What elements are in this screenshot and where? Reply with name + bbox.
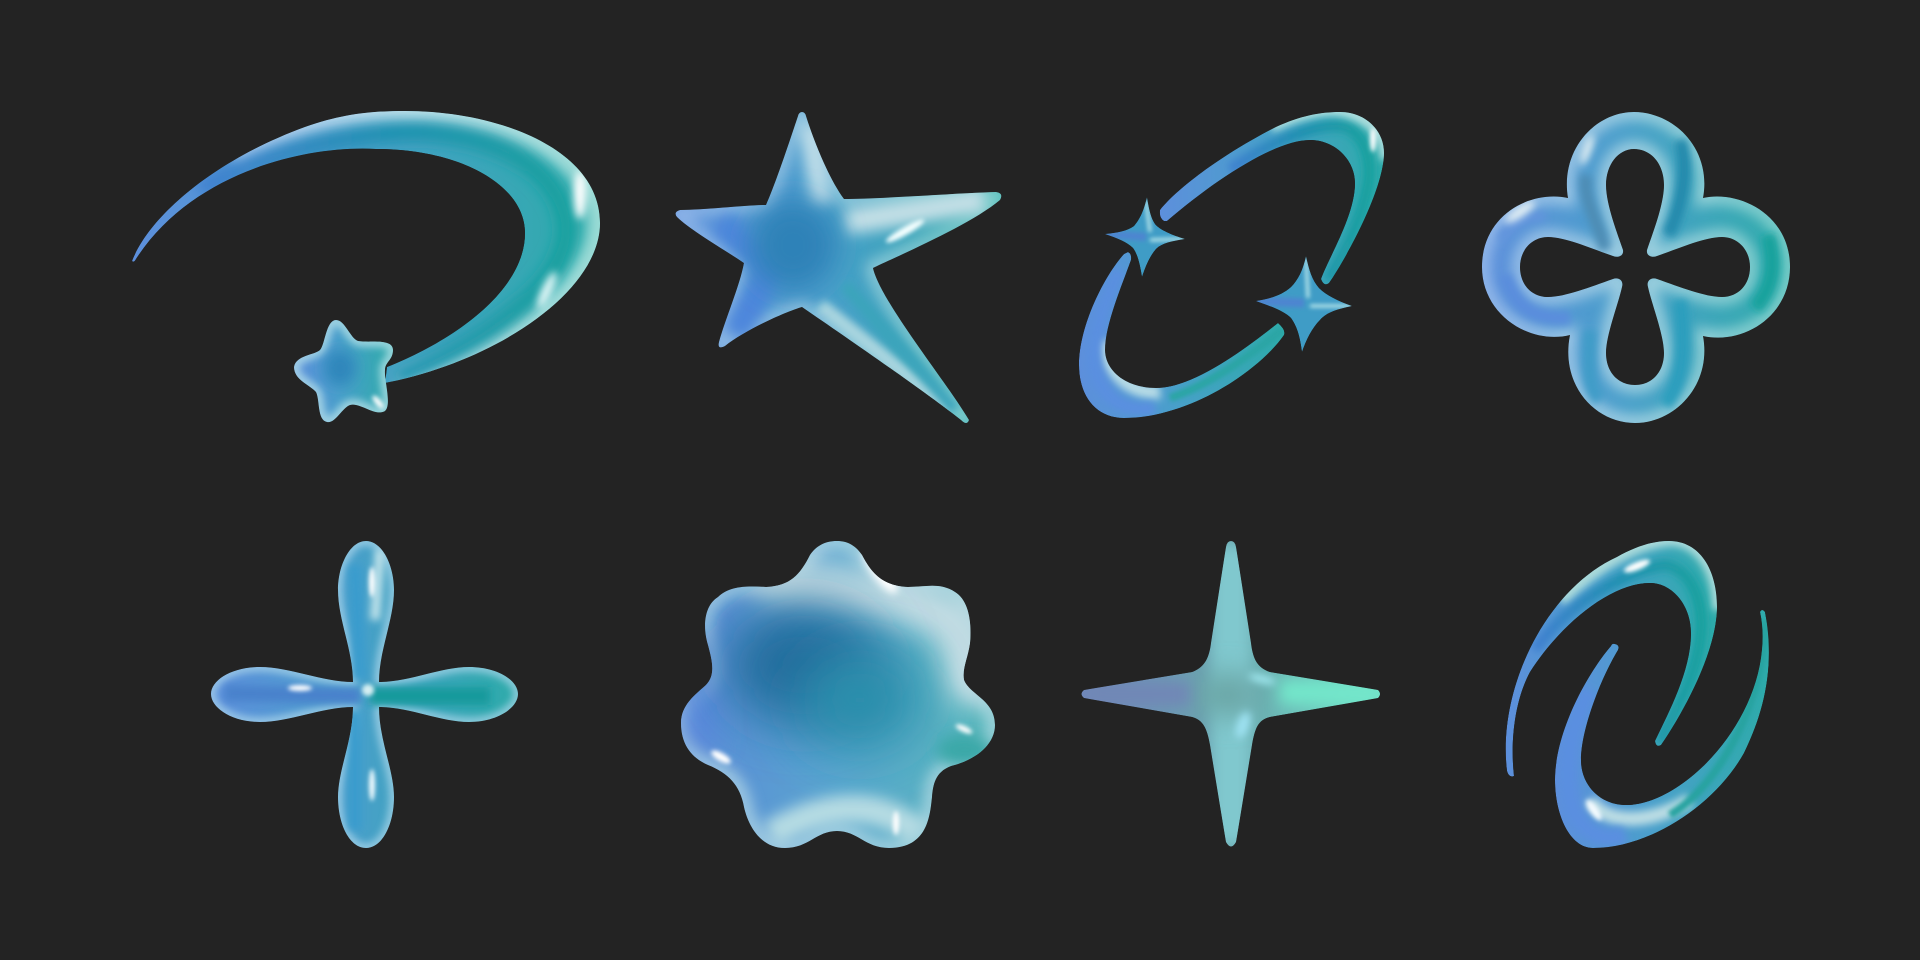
icon: four-petal clover ring	[1482, 112, 1790, 423]
icon: rounded four-petal cross	[211, 541, 518, 848]
icon: orbit with two sparkles	[1079, 108, 1388, 418]
icon: large four-arm five-point star	[676, 112, 1001, 423]
icon: wavy badge blob	[681, 541, 995, 848]
small five-point star head	[294, 320, 393, 422]
icon: shooting star with crescent tail	[132, 108, 602, 422]
lower spiral arm	[1555, 610, 1769, 848]
lower orbit arc	[1079, 252, 1284, 418]
crescent tail	[132, 108, 602, 385]
icon: four-point sparkle	[1082, 541, 1380, 846]
right sparkle	[1256, 256, 1352, 352]
left sparkle	[1105, 197, 1185, 277]
upper spiral arm	[1506, 538, 1720, 776]
icon: spiral galaxy	[1506, 538, 1769, 848]
upper orbit arc	[1160, 108, 1388, 284]
